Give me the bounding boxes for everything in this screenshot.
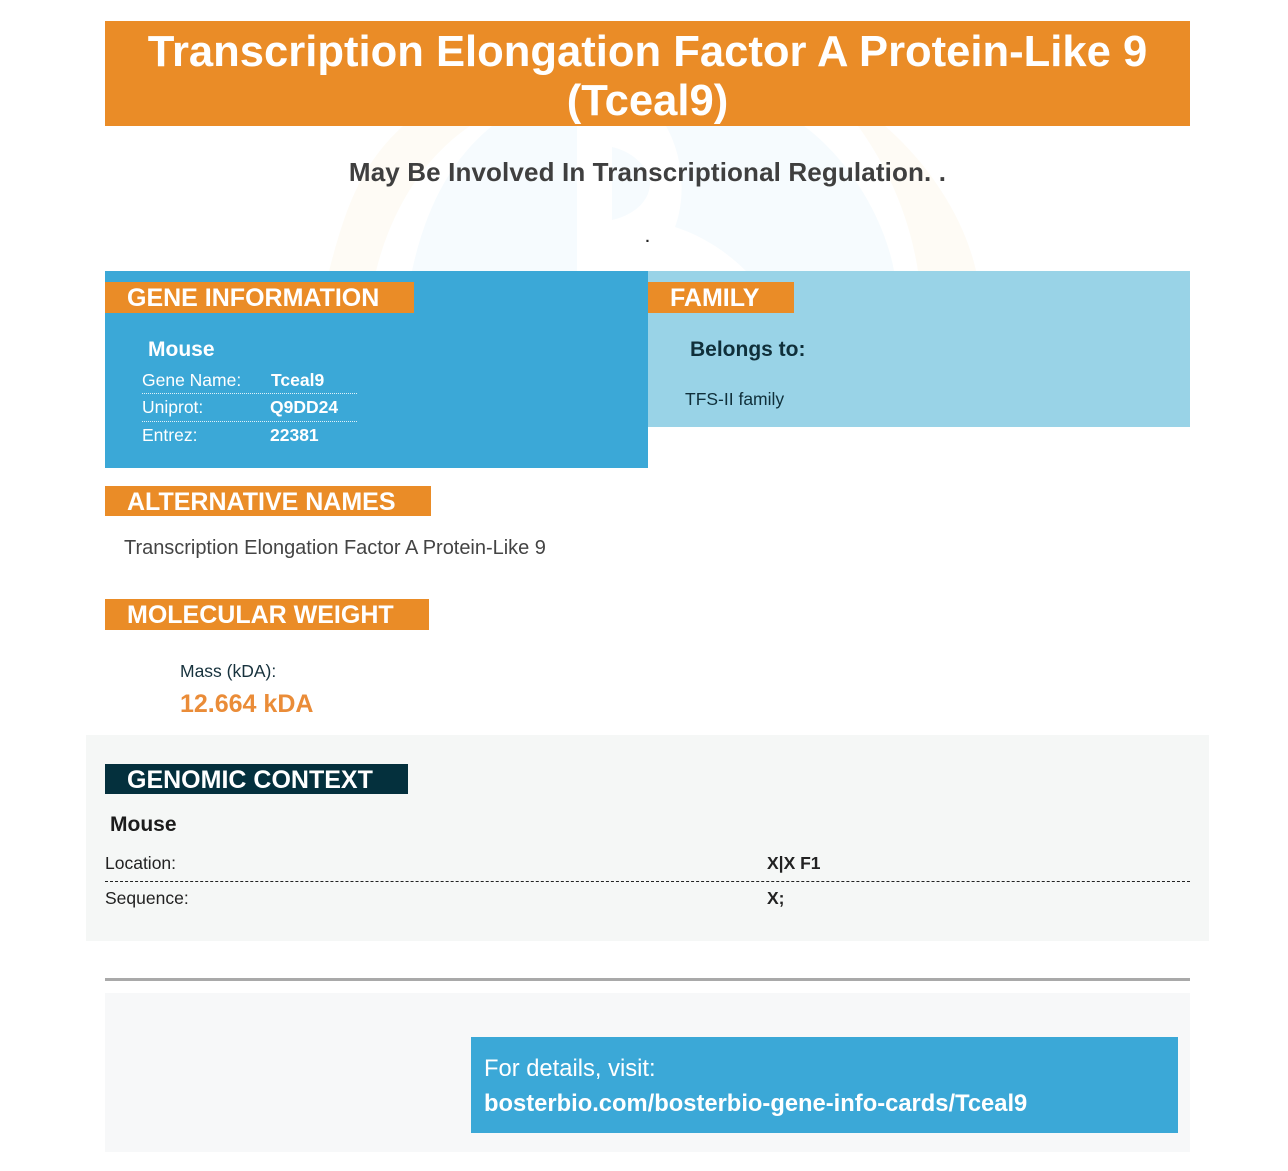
panel: footer: [105, 993, 1190, 1152]
row: location: [105, 850, 1190, 882]
small dot text: .: [645, 229, 650, 246]
divider line: [105, 978, 1190, 981]
callout: details link: [471, 1037, 1178, 1133]
row: location: Location:: [105, 853, 176, 873]
mass value: 12.664 kDA: [180, 690, 313, 718]
panel: gene information: [105, 271, 648, 468]
heading: alternative names: ALTERNATIVE NAMES: [127, 488, 396, 516]
row: location: X|X F1: [767, 853, 821, 873]
row: gene name: Tceal9: [271, 370, 324, 390]
callout label: For details, visit:: [484, 1055, 656, 1082]
heading: gene information: GENE INFORMATION: [127, 284, 379, 312]
row: sequence: X;: [767, 888, 784, 908]
row: gene name: [142, 367, 357, 394]
mass label: Mass (kDA):: [180, 661, 276, 681]
species label: Mouse: [110, 813, 177, 836]
family name: TFS-II family: [685, 389, 784, 409]
row: entrez: [142, 425, 319, 445]
subtitle: May Be Involved In Transcriptional Regulation. .: [349, 157, 946, 187]
row: entrez: 22381: [270, 425, 319, 445]
row: uniprot: Uniprot:: [142, 397, 203, 417]
background watermark logo: [329, 126, 976, 271]
heading: molecular weight: MOLECULAR WEIGHT: [127, 601, 394, 629]
alternative names text: Transcription Elongation Factor A Protein-Like 9: [124, 537, 546, 559]
row: gene name: Gene Name:: [142, 370, 241, 390]
heading: family: [648, 282, 794, 313]
panel: family: [648, 271, 1190, 427]
title banner: (Tceal9): [567, 77, 728, 125]
title banner: Transcription Elongation Factor A Protein-Like 9: [148, 28, 1147, 76]
callout url: bosterbio.com/bosterbio-gene-info-cards/Tceal9: [484, 1090, 1027, 1117]
heading: family: FAMILY: [670, 284, 759, 312]
heading: genomic context: GENOMIC CONTEXT: [127, 766, 373, 794]
row: sequence: Sequence:: [105, 888, 189, 908]
panel: genomic context: [86, 735, 1209, 941]
species label: Mouse: [148, 338, 215, 361]
row: entrez: Entrez:: [142, 425, 197, 445]
row: uniprot: Q9DD24: [270, 397, 338, 417]
row: sequence: [105, 888, 784, 908]
row: uniprot: [142, 394, 357, 422]
belongs to label: Belongs to:: [690, 338, 806, 361]
title banner: [105, 21, 1190, 126]
